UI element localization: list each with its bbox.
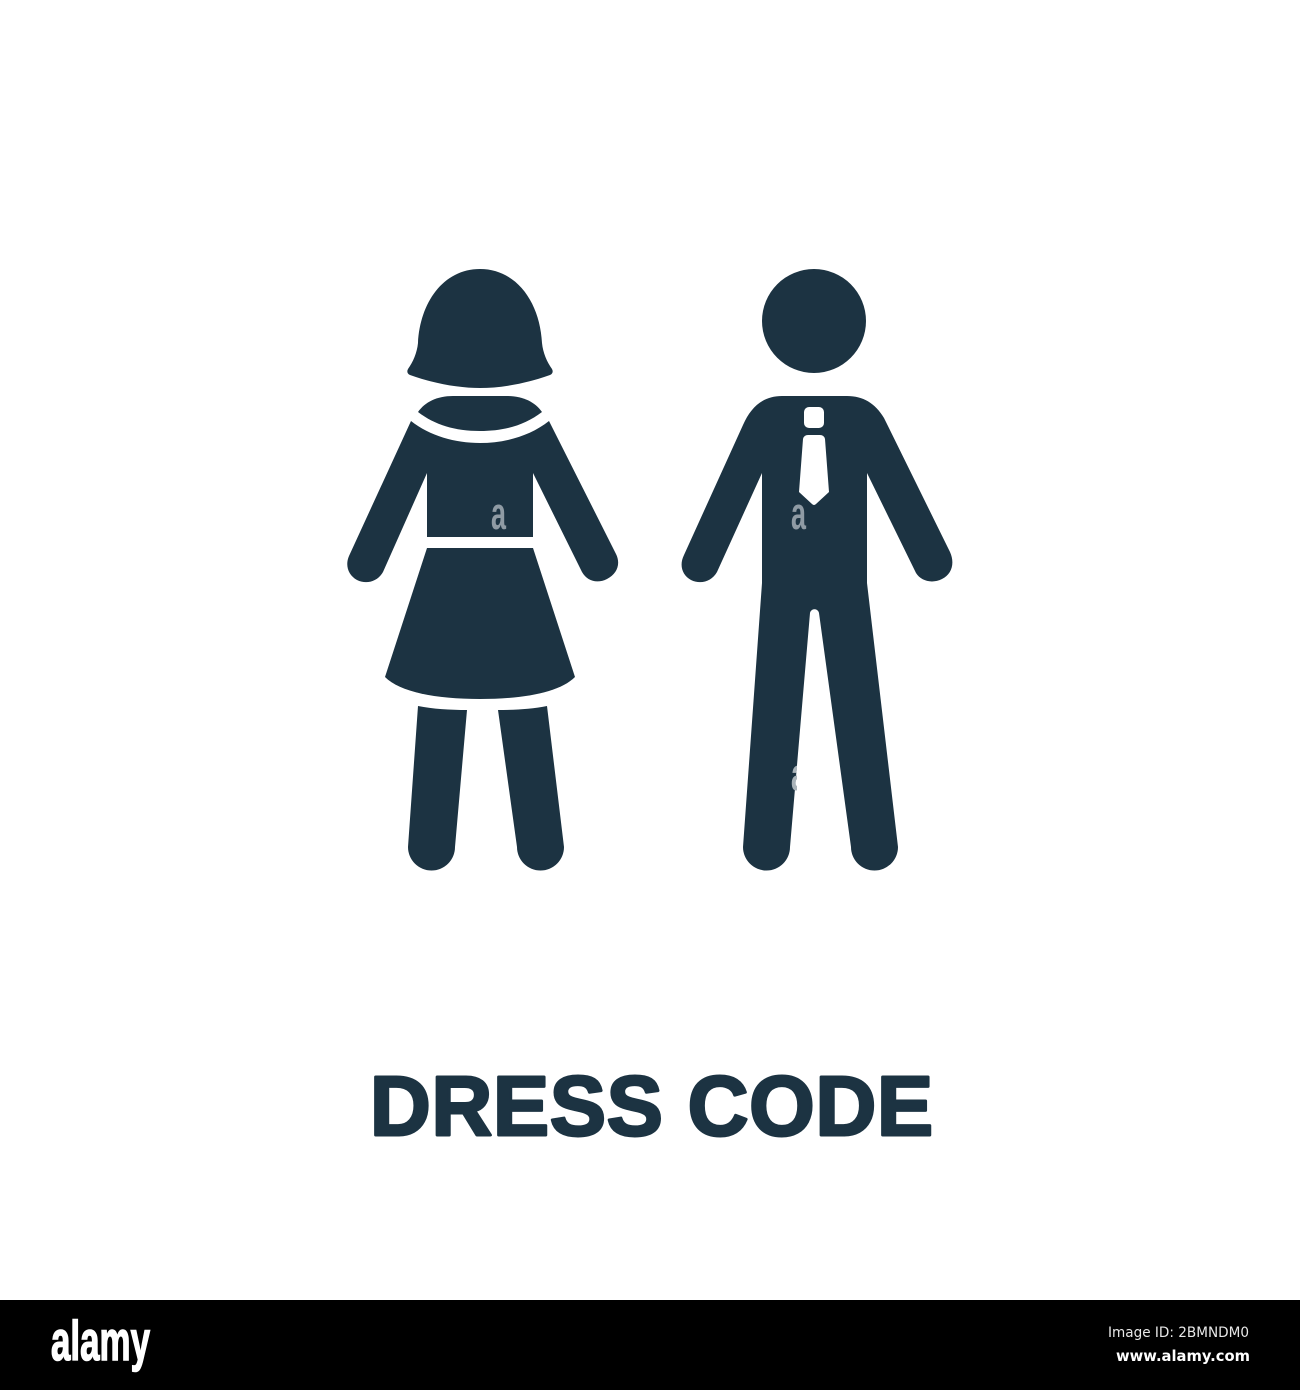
footer logo: alamy: [51, 1309, 150, 1372]
woman jacket and arms: [347, 421, 618, 582]
man head: [762, 269, 866, 373]
woman collar: [418, 396, 542, 431]
footer image id: Image ID: 2BMNDM0: [1108, 1325, 1249, 1341]
watermark letter on man: a: [791, 488, 807, 539]
icon: woman figure: [347, 269, 618, 870]
woman right leg: [498, 706, 564, 870]
footer bar: [0, 1300, 1300, 1390]
title: DRESS CODE: [370, 1059, 933, 1153]
watermark letter on woman: a: [491, 488, 507, 539]
icon: man figure: [682, 269, 952, 870]
woman skirt: [385, 548, 575, 699]
watermark letter on man's leg: a: [791, 749, 807, 800]
woman hair: [407, 269, 553, 388]
icon: man tie: [799, 435, 829, 505]
woman left leg: [408, 706, 467, 870]
icon: man tie knot: [804, 407, 824, 428]
man suit body with arms and legs: [682, 396, 952, 870]
footer website: www.alamy.com: [1116, 1347, 1250, 1365]
